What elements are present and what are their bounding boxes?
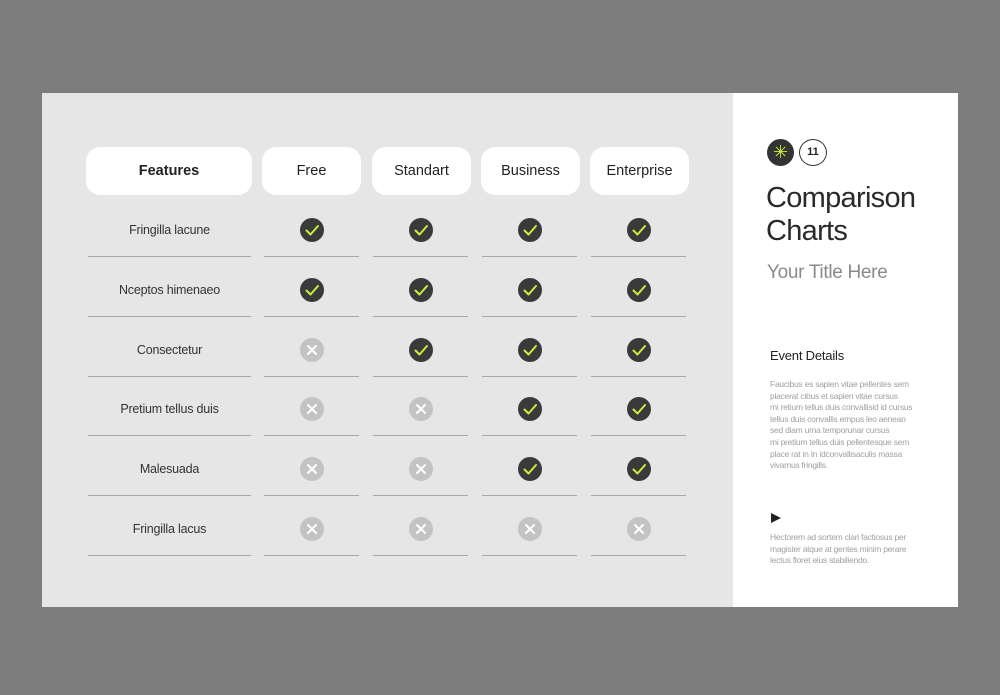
subtitle: Your Title Here [767, 262, 887, 283]
header: Free [262, 147, 361, 195]
icon: page number [799, 139, 827, 166]
title [766, 182, 915, 247]
text block: event details [770, 379, 912, 470]
row labels: Consectetur [137, 343, 202, 357]
header: Features: Features [139, 163, 199, 179]
text block: footer: magister atque at gentes minim perare [770, 544, 906, 554]
text block: event details: Faucibus es sapien vitae pellentes sem [770, 379, 909, 389]
icon: badge star [767, 139, 794, 166]
row labels: Fringilla lacus [133, 522, 206, 536]
panel: sidebar [733, 93, 958, 607]
header: Standart [372, 147, 471, 195]
icon: page number: 11 [807, 146, 819, 158]
row labels: Fringilla lacune [129, 223, 210, 237]
icon: play arrow [771, 513, 781, 523]
header: Business: Business [501, 163, 560, 179]
title: Charts [766, 215, 847, 247]
row labels: Nceptos himenaeo [119, 283, 220, 297]
text block: event details: place rat in In idconvallisaculis massa [770, 449, 902, 459]
header: Standart: Standart [394, 163, 449, 179]
text block: event details: mi retium tellus duis convallisid id cursus [770, 402, 912, 412]
text block: event details: sed diam urna temporunar cursus [770, 425, 889, 435]
heading: Event Details: Event Details [770, 348, 844, 363]
row labels: Malesuada [140, 462, 199, 476]
header: Enterprise [590, 147, 689, 195]
text block: event details: placerat cibus et sapien vitae cursus [770, 391, 898, 401]
icon: badge star: ✳ [773, 142, 788, 162]
text block: footer: lectus floret eius stabiliendo. [770, 555, 869, 565]
header: Enterprise: Enterprise [606, 163, 673, 179]
text block: footer [770, 532, 906, 565]
header: Free: Free [297, 163, 326, 179]
text block: footer: Hectorem ad sortem clari factiosus per [770, 532, 906, 542]
text block: event details: mi pretium tellus duis pellentesque sem [770, 437, 909, 447]
header: Business [481, 147, 580, 195]
panel: table [42, 93, 733, 607]
header: Features [86, 147, 252, 195]
text block: event details: tellus duis convallis empus leo aenean [770, 414, 906, 424]
row labels [119, 223, 220, 536]
title: Comparison [766, 182, 915, 214]
row labels: Pretium tellus duis [120, 402, 219, 416]
text block: event details: vivamus fringills. [770, 460, 828, 470]
